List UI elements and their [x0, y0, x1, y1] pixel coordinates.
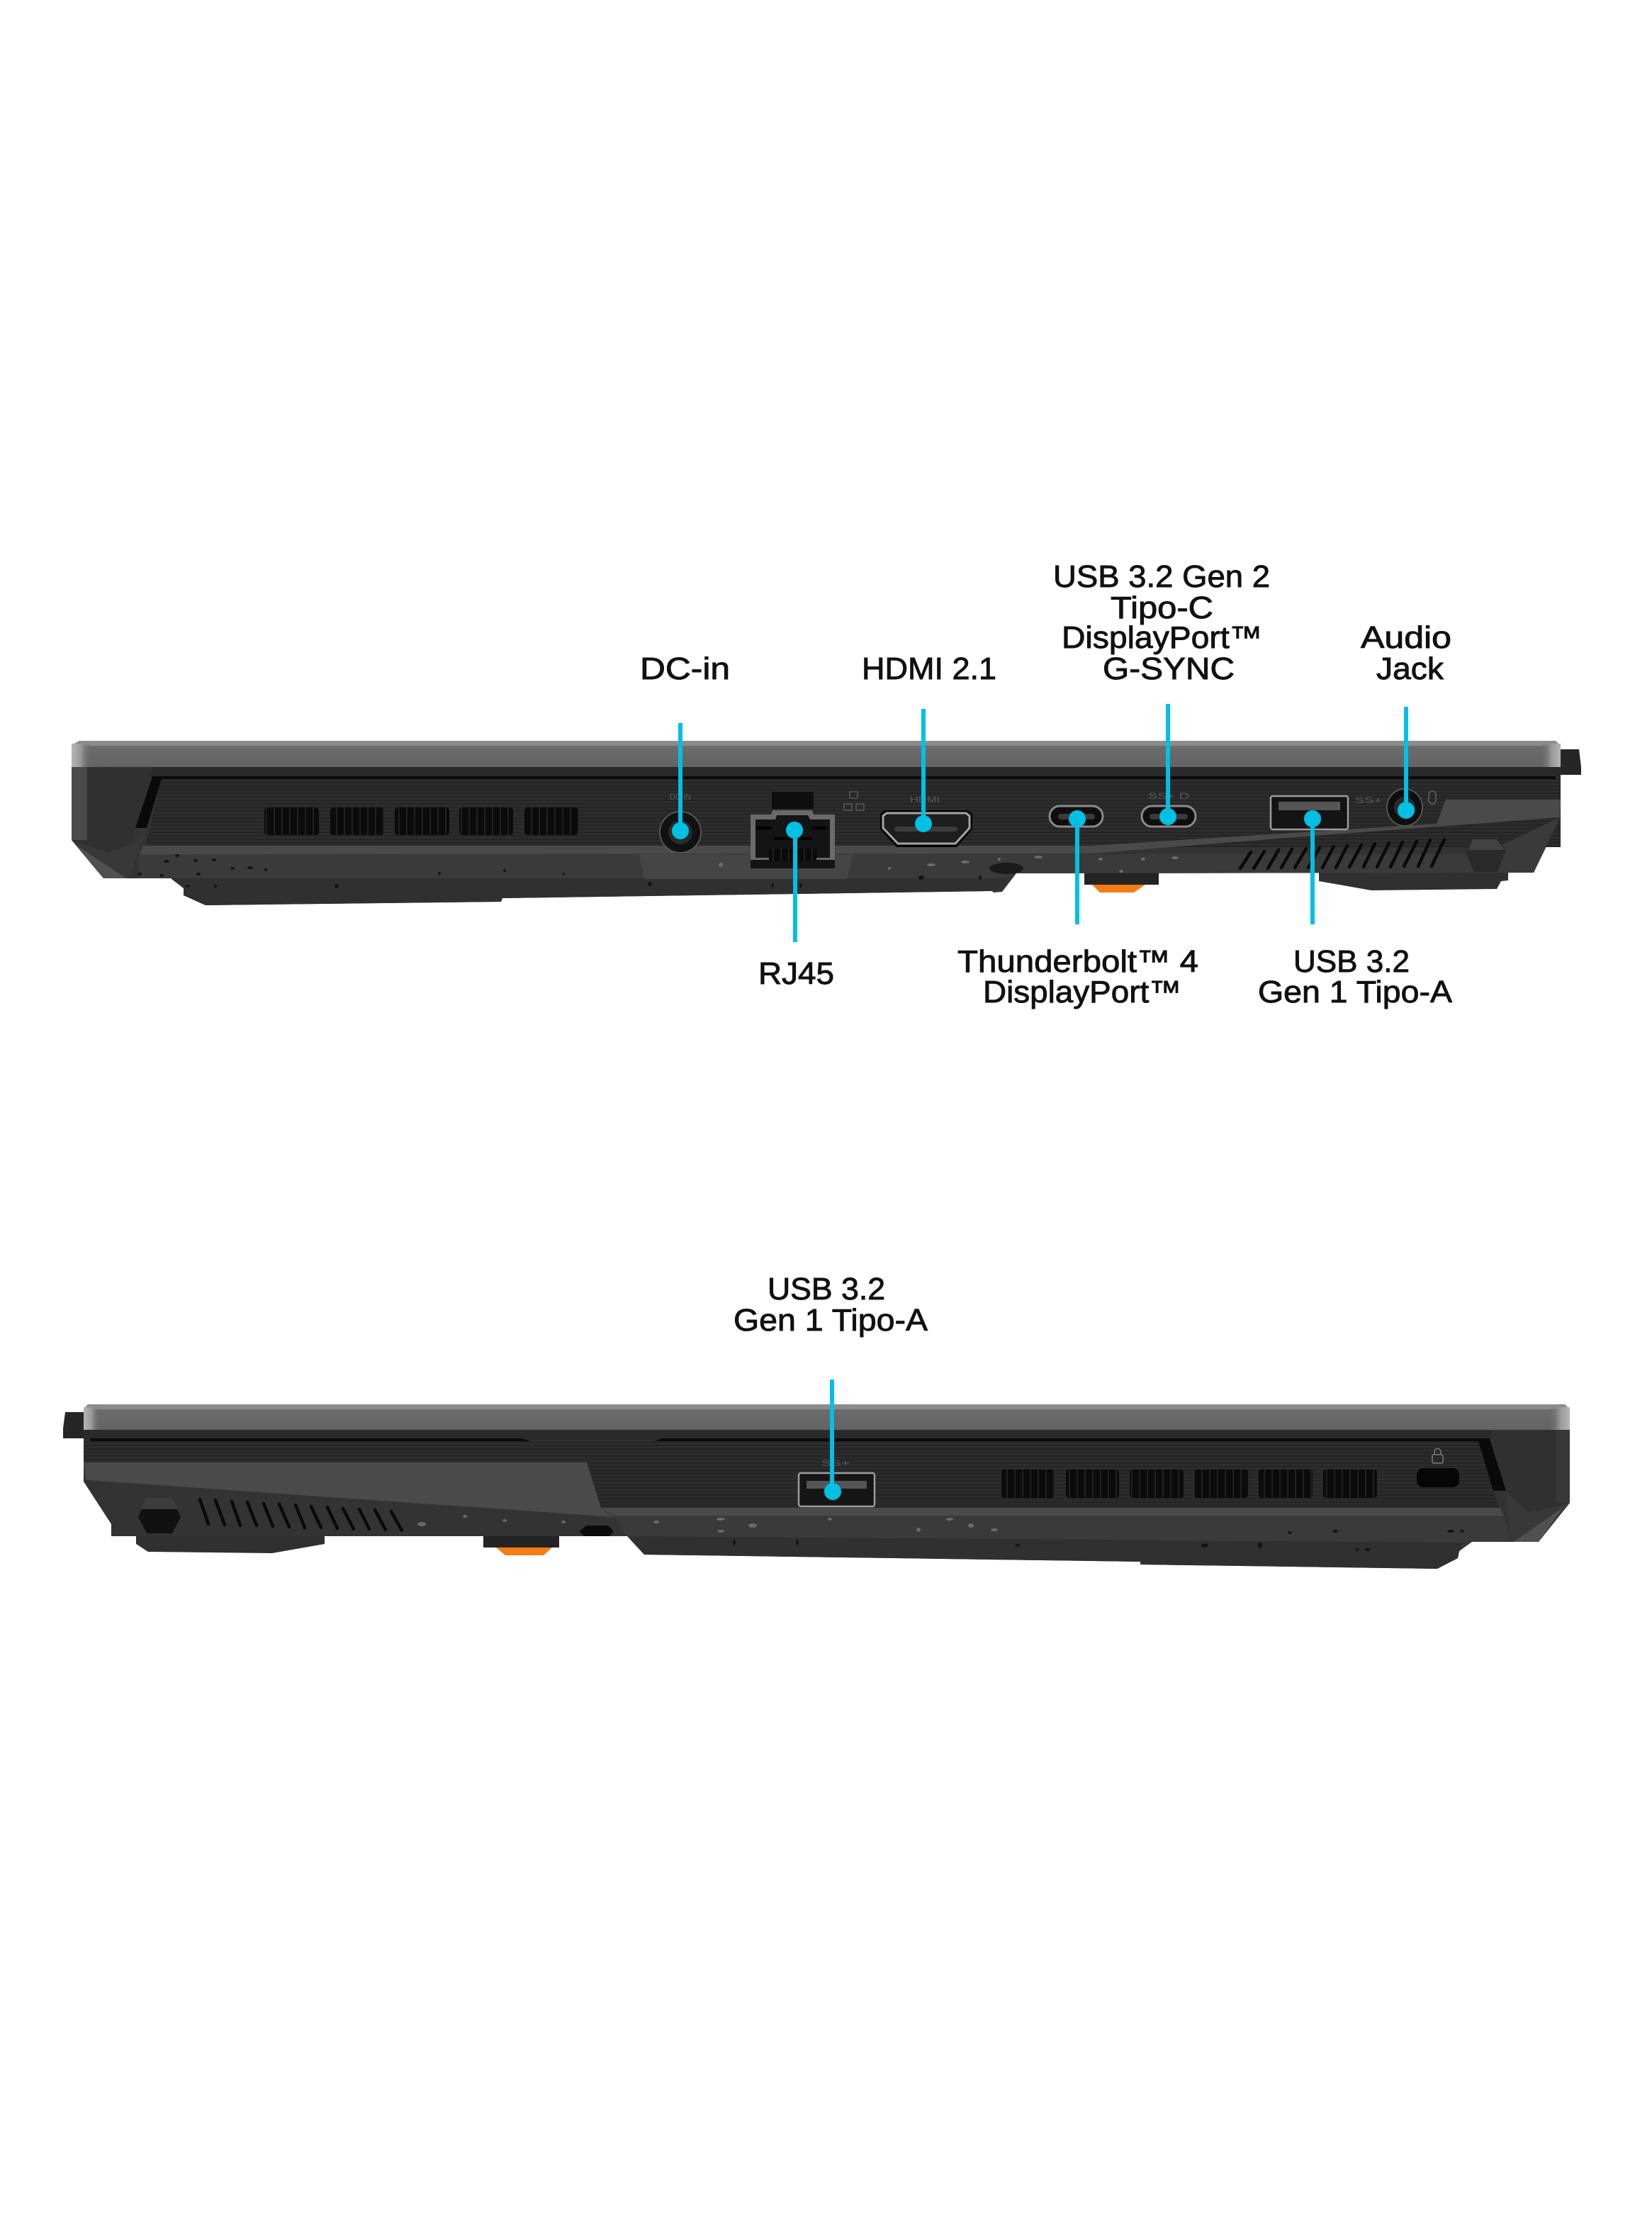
port: USB-A: [799, 1458, 875, 1506]
callout: DC-in: DC-in: [640, 651, 730, 686]
right corner block: [1490, 1430, 1570, 1542]
black gap line: [135, 776, 1556, 828]
hex screw: [1466, 838, 1506, 872]
raised panel behind RJ45: [639, 854, 853, 879]
intake slits: [1240, 839, 1444, 868]
light speckles: [719, 856, 1179, 873]
callout: USB 3.2 Gen 1 Tipo-A (right side): [734, 1272, 928, 1500]
port: HDMI: [880, 795, 972, 847]
dark hinge band: [84, 1430, 1570, 1440]
chassis silhouette: [84, 1430, 1570, 1569]
lid: [72, 741, 1561, 767]
dark speckles: [733, 1530, 1464, 1551]
port: DC-in: [660, 792, 701, 853]
callout: USB 3.2 Gen 2 Tipo-C: DisplayPort™: [1062, 620, 1262, 655]
callout: HDMI 2.1: [862, 651, 996, 832]
nub notch: [579, 1526, 614, 1536]
air vents: [1001, 1470, 1377, 1498]
callout: audio jack: Audio: [1361, 620, 1451, 655]
port: audio jack: [1387, 789, 1436, 826]
hex screw: [138, 1498, 181, 1533]
light speckles: [417, 1515, 998, 1533]
callout: USB 3.2 Gen 2 Tipo-C: [1053, 559, 1270, 825]
nub notch: [989, 863, 1023, 874]
intake slits: [200, 1499, 402, 1530]
dark hinge band: [72, 767, 1561, 777]
port: USB-A: SS+: [1355, 795, 1382, 805]
rear rubber foot: [136, 1531, 325, 1553]
port: HDMI: HDMI: [910, 795, 940, 805]
callout: audio jack: [1361, 620, 1451, 819]
callout: USB 3.2 Gen 2 Tipo-C: Tipo-C: [1111, 591, 1213, 625]
lid: [84, 1404, 1570, 1430]
callout: USB 3.2 Gen 1 Tipo-A (left side): USB 3.2: [1293, 944, 1410, 979]
callout: Thunderbolt 4: [957, 810, 1198, 1009]
lower base lip: [171, 878, 1006, 905]
icon: network: [844, 792, 864, 810]
callout: USB 3.2 Gen 2 Tipo-C: USB 3.2 Gen 2: [1053, 559, 1270, 594]
orange hinge foot: [483, 1531, 559, 1555]
left corner block: [72, 767, 152, 878]
callout: USB 3.2 Gen 2 Tipo-C: G-SYNC: [1103, 651, 1235, 686]
callout: USB 3.2 Gen 1 Tipo-A (left side): Gen 1 Tipo-A: [1258, 975, 1453, 1009]
light band: [601, 1508, 1504, 1516]
port: DC-in: DC-IN: [670, 792, 691, 802]
lower speckled base: [139, 817, 1560, 879]
callout: DC-in: [640, 651, 730, 839]
callout: Thunderbolt 4: Thunderbolt™ 4: [957, 944, 1198, 979]
port: RJ45: [751, 792, 835, 868]
port: USB-C: [1142, 791, 1196, 827]
lower speckled base: [602, 1516, 1511, 1551]
port: Kensington lock: [1417, 1449, 1459, 1487]
lower base lip: [627, 1536, 1463, 1569]
light band and wedge: [140, 800, 1561, 854]
chassis silhouette: [72, 767, 1561, 905]
callout: USB 3.2 Gen 1 Tipo-A (left side): [1258, 810, 1453, 1009]
laptop: left side view with ports: [72, 741, 1581, 905]
port: USB-A: SS+: [821, 1458, 850, 1468]
air vents: [264, 807, 578, 835]
black gap line: [90, 1438, 1506, 1491]
port: USB-A: [1271, 795, 1382, 829]
grey side panel: [84, 1462, 614, 1517]
callout: RJ45: RJ45: [758, 956, 834, 991]
hinge tab: [1559, 749, 1581, 775]
hinge tab: [63, 1412, 86, 1438]
port: USB-C: SS+ D: [1148, 791, 1190, 801]
speckles: [137, 854, 982, 888]
callout: audio jack: Jack: [1376, 651, 1444, 686]
callout: Thunderbolt 4: DisplayPort™: [983, 975, 1181, 1009]
laptop: right side view: [63, 1404, 1570, 1569]
callout: RJ45: [758, 822, 834, 991]
ribbed rear panel: [145, 778, 1561, 847]
port: Thunderbolt 4: [1050, 806, 1103, 827]
callout: HDMI 2.1: HDMI 2.1: [862, 651, 996, 686]
ribbed panel: [84, 1441, 1500, 1509]
orange hinge foot: [1084, 868, 1159, 892]
callout: USB 3.2 Gen 1 Tipo-A (right side): USB 3.2: [768, 1272, 885, 1306]
lower left base: [86, 1480, 614, 1536]
callout: USB 3.2 Gen 1 Tipo-A (right side): Gen 1 Tipo-A: [734, 1303, 928, 1338]
rear rubber foot: [1319, 868, 1508, 890]
